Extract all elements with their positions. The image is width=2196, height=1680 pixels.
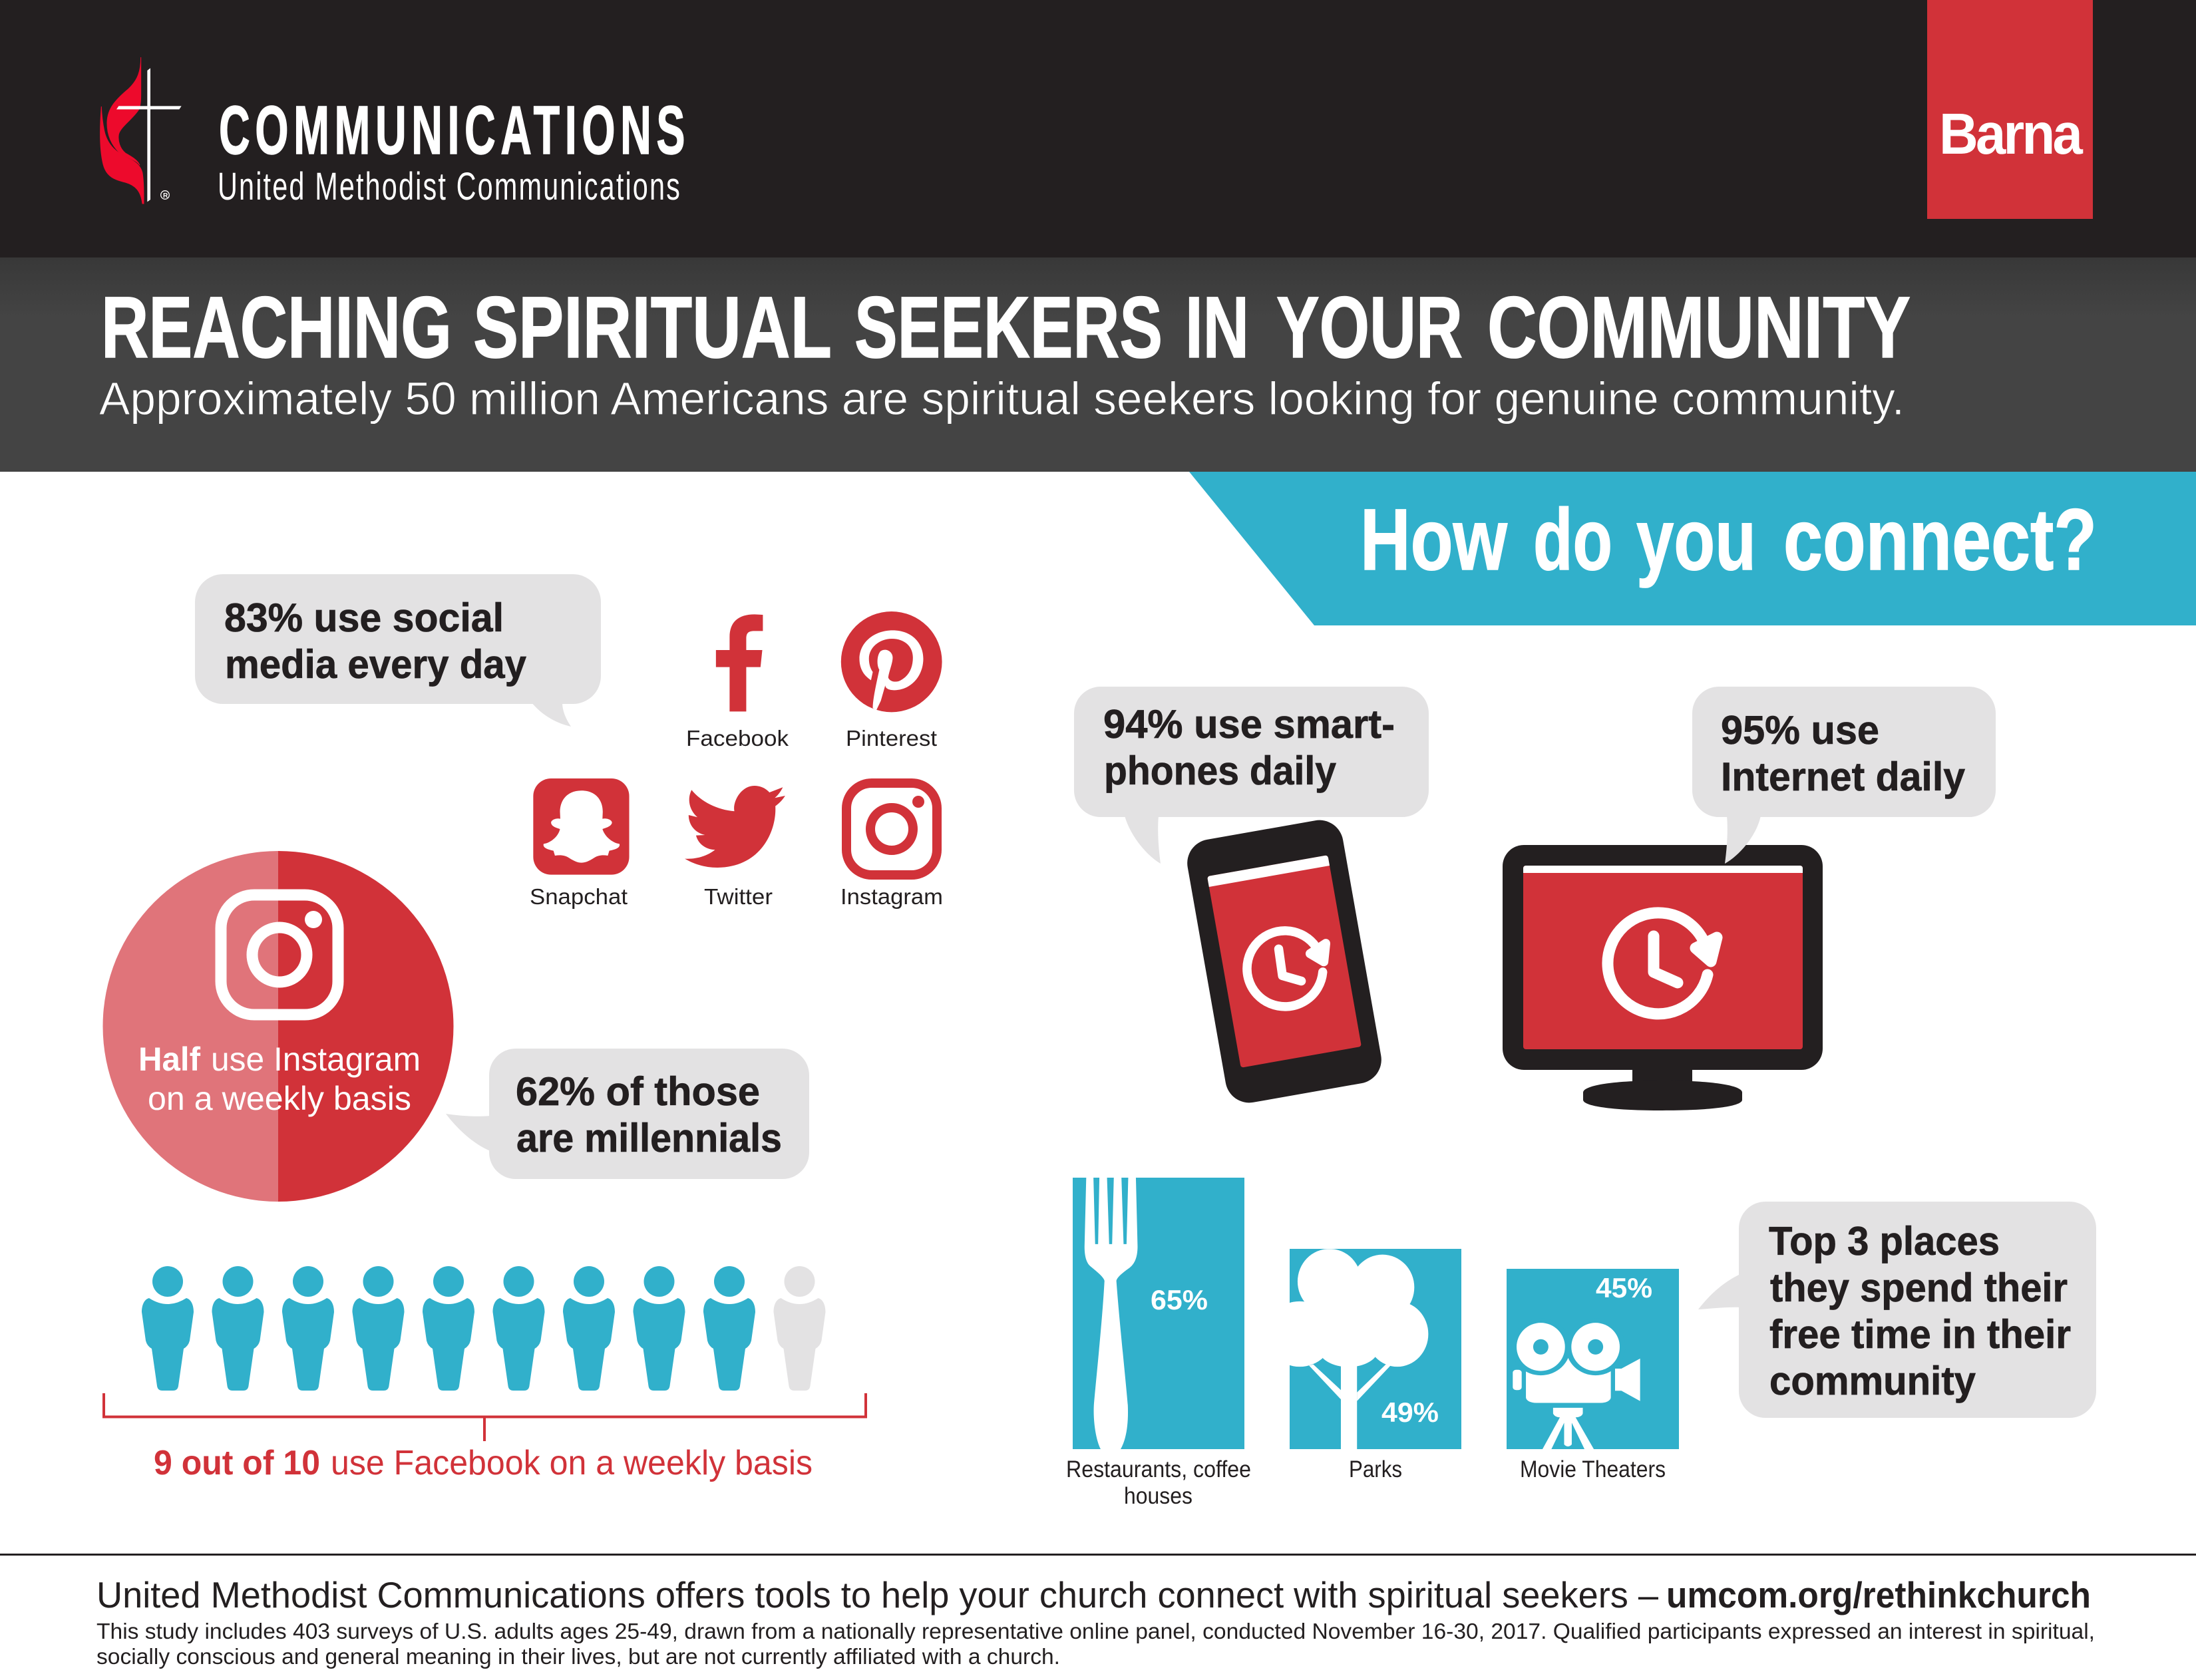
icon: twitter [685, 786, 785, 909]
footer call to action: United Methodist Communications offers tools to help your church connect with spiritual seekers – [96, 1574, 1658, 1615]
methodology note: This study includes 403 surveys of U.S. adults ages 25-49, drawn from a nationally representative online panel, conducted November 16-30, 2017. Qualified participants expressed an interest in spiritual, [96, 1619, 2095, 1643]
callout: top 3 places [1698, 1202, 2096, 1418]
callout: 95% internet: 95% use [1721, 708, 1879, 753]
callout: 83% social media: 83% use social [224, 595, 504, 640]
circle caption [138, 1041, 421, 1117]
icon: monitor clock [1608, 913, 1717, 1014]
icon: facebook [686, 614, 789, 751]
main title: YOUR [1276, 278, 1463, 376]
chart: parks 49%: 49% [1381, 1397, 1439, 1428]
main title: REACHING [101, 278, 452, 376]
callout: 94% smartphones [1074, 687, 1429, 864]
chart: parks 49%: Parks [1349, 1456, 1402, 1482]
main title: SPIRITUAL [473, 278, 832, 376]
header bar [0, 0, 2196, 257]
icon: snapchat: Snapchat [530, 884, 628, 909]
icon: twitter: Twitter [704, 884, 773, 909]
title band [0, 257, 2196, 472]
icon: desktop monitor [1503, 845, 1823, 1110]
icon: instagram [840, 783, 943, 909]
banner: how do you connect: How [1360, 490, 1508, 588]
main title [101, 278, 1911, 376]
Barna logo: Barna [1939, 102, 2083, 166]
callout: top 3 places: community [1769, 1359, 1976, 1403]
callout: 83% social media [195, 574, 601, 727]
icon: phone clock [1242, 925, 1334, 1011]
facebook caption: use Facebook on a weekly basis [331, 1444, 813, 1482]
callout: 62% millennials [446, 1049, 809, 1179]
callout: 95% internet [1692, 687, 1996, 864]
callout: top 3 places: Top 3 places [1769, 1219, 2000, 1263]
icon: instagram: Instagram [840, 884, 943, 909]
footer [0, 1554, 2196, 1669]
organisation name: COMMUNICATIONS [219, 92, 690, 168]
callout: 62% millennials: 62% of those [516, 1069, 760, 1114]
methodology note: socially conscious and general meaning in their lives, but are not currently affiliated with a church. [96, 1644, 1060, 1669]
icon: fork [1085, 1178, 1137, 1449]
chart: restaurants 65% [1066, 1178, 1251, 1509]
banner: how do you connect: do [1533, 490, 1612, 588]
chart: movie theaters 45% [1507, 1269, 1679, 1482]
bracket [104, 1393, 866, 1441]
registered mark [161, 191, 169, 200]
chart: movie theaters 45%: 45% [1596, 1272, 1652, 1303]
social media icons [530, 611, 943, 909]
callout: top 3 places: they spend their [1770, 1265, 2068, 1310]
icon: snapchat [530, 778, 630, 909]
icon: pinterest: Pinterest [846, 726, 937, 751]
main title: COMMUNITY [1487, 278, 1911, 376]
icon: facebook: Facebook [686, 726, 789, 751]
instagram half circle [103, 851, 454, 1202]
icon: movie camera [1511, 1318, 1640, 1449]
banner: how do you connect: you [1636, 490, 1756, 588]
registered mark: R [163, 192, 168, 200]
chart: restaurants 65%: 65% [1151, 1284, 1208, 1315]
methodology note [96, 1619, 2095, 1669]
main title: IN [1185, 278, 1249, 376]
callout: 83% social media: media every day [225, 642, 527, 687]
callout: 95% internet: Internet daily [1721, 755, 1966, 799]
subtitle: Approximately 50 million Americans are spiritual seekers looking for genuine community. [99, 373, 1905, 424]
footer call to action: umcom.org/rethinkchurch [1666, 1574, 2091, 1615]
callout: top 3 places: free time in their [1769, 1312, 2071, 1357]
chart: movie theaters 45%: Movie Theaters [1520, 1456, 1666, 1482]
chart: restaurants 65%: houses [1124, 1483, 1192, 1509]
logo: cross and flame [100, 57, 182, 204]
circle caption: Half [138, 1041, 200, 1078]
chart: restaurants 65%: Restaurants, coffee [1066, 1456, 1251, 1482]
banner: how do you connect [1189, 472, 2196, 625]
callout: 94% smartphones: 94% use smart- [1103, 702, 1395, 747]
icon: pinterest [841, 611, 942, 751]
Barna logo [1927, 0, 2093, 219]
circle caption: use Instagram [211, 1041, 421, 1078]
circle caption: on a weekly basis [148, 1080, 411, 1117]
facebook caption: 9 out of 10 [154, 1444, 320, 1482]
chart: parks 49% [1290, 1249, 1461, 1477]
main title: SEEKERS [854, 278, 1163, 376]
people pictogram: 9 out of 10 [142, 1266, 825, 1391]
banner: how do you connect: connect? [1783, 490, 2097, 588]
icon: smartphone [1183, 816, 1385, 1106]
icon: tree [1290, 1249, 1428, 1449]
organisation subtitle: United Methodist Communications [218, 165, 681, 208]
callout: 62% millennials: are millennials [516, 1116, 782, 1160]
callout: 94% smartphones: phones daily [1104, 749, 1337, 793]
icon: instagram white [221, 895, 338, 1015]
